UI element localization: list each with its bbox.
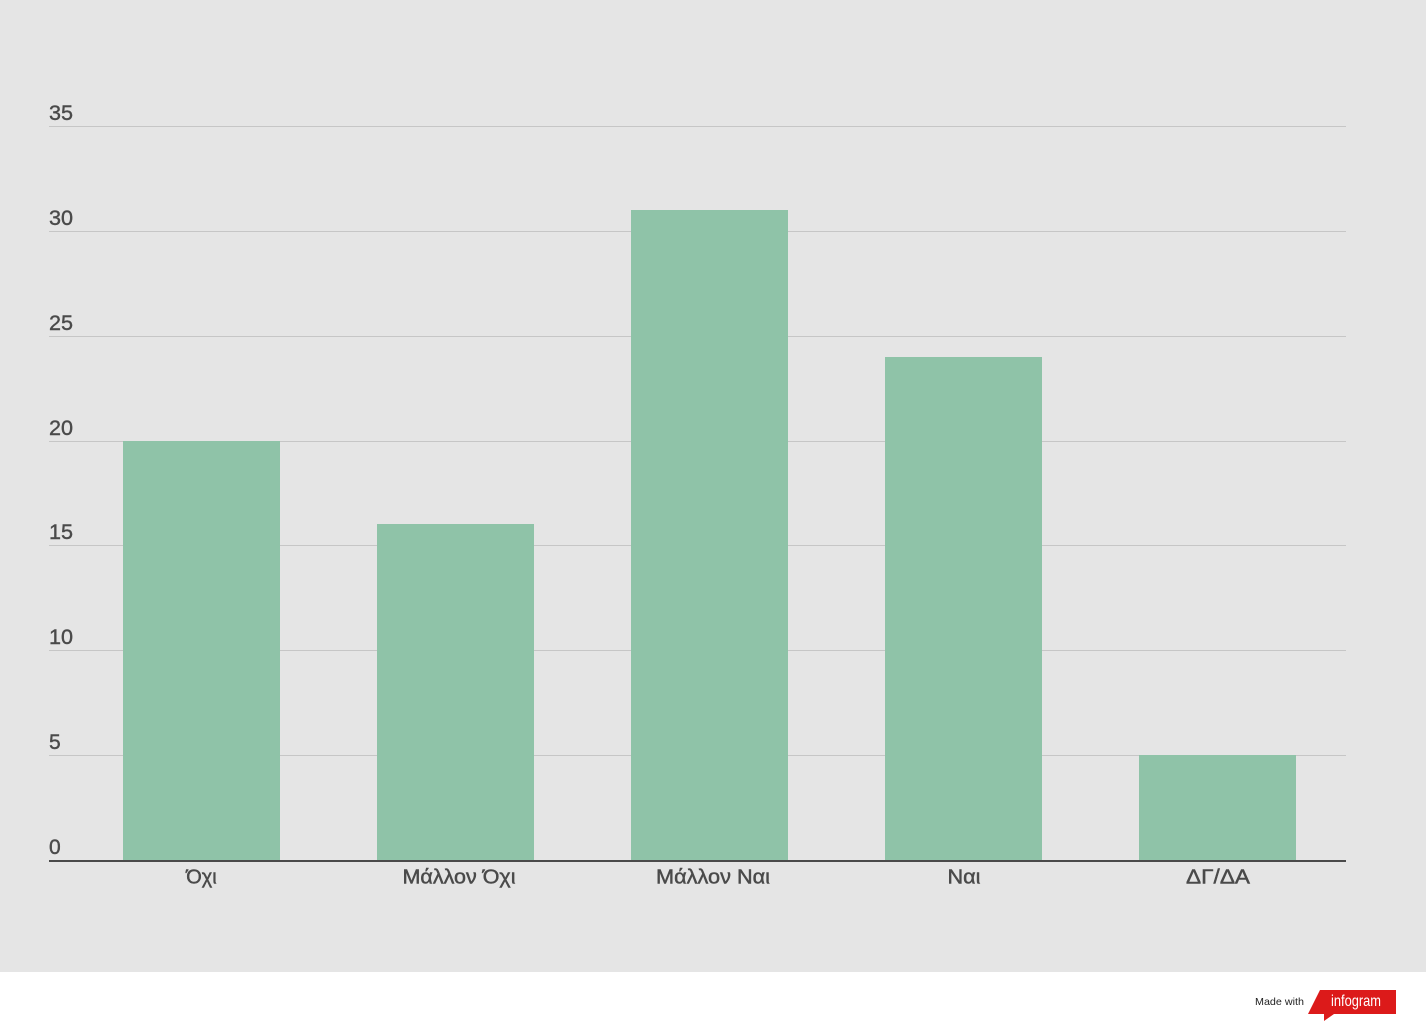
y axis labels <box>49 102 73 859</box>
category labels: Μάλλον Ναι <box>656 866 770 888</box>
y axis labels: 35 <box>49 102 73 125</box>
category labels: Ναι <box>948 866 980 888</box>
y axis labels: 15 <box>49 521 73 544</box>
category labels: Μάλλον Όχι <box>402 866 516 888</box>
category labels: Όχι <box>185 866 217 888</box>
y axis labels: 5 <box>49 731 61 754</box>
y axis labels: 20 <box>49 417 73 440</box>
y axis labels: 25 <box>49 312 73 335</box>
category labels: ΔΓ/ΔΑ <box>1186 866 1251 888</box>
bar chart <box>123 210 1296 860</box>
y axis labels: 10 <box>49 626 73 649</box>
footer: made with infogram: infogram <box>1331 993 1381 1010</box>
footer: made with infogram <box>1255 990 1396 1021</box>
y axis labels: 0 <box>49 836 61 859</box>
category labels <box>185 866 1251 888</box>
y axis labels: 30 <box>49 207 73 230</box>
footer: made with infogram: Made with <box>1255 996 1304 1008</box>
